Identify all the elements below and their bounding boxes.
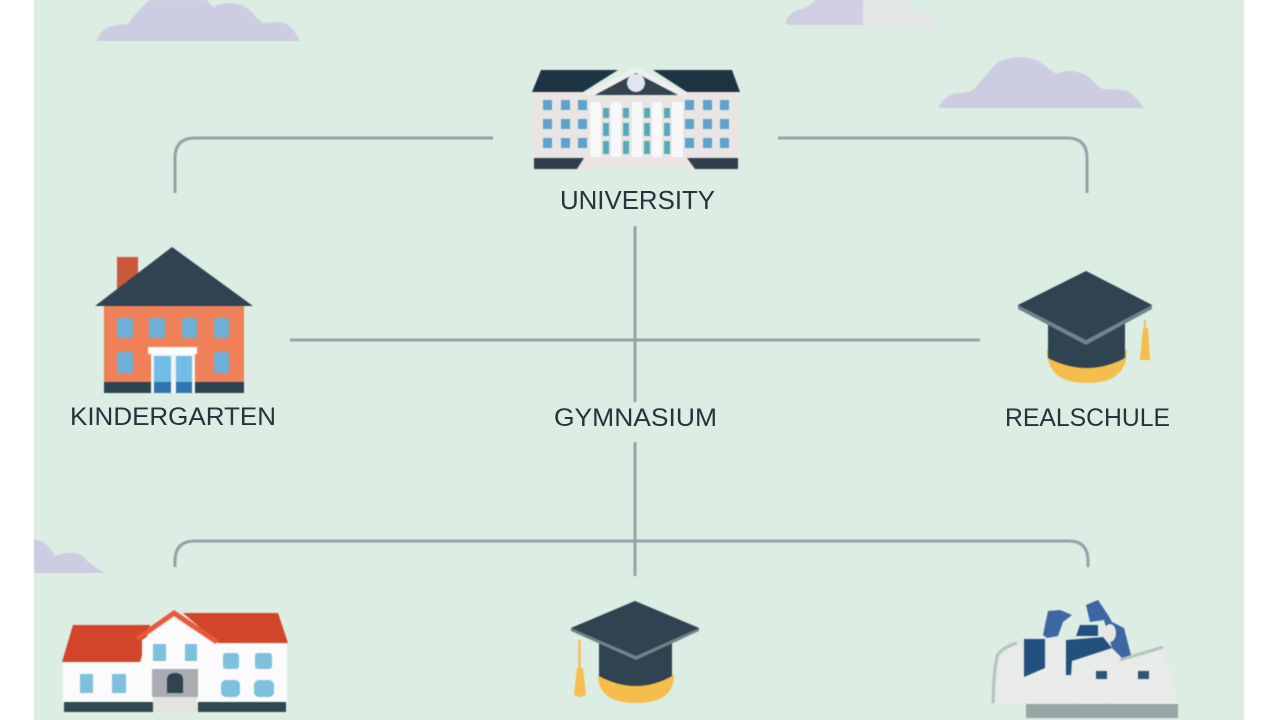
icon: graduation cap right xyxy=(1018,271,1152,383)
label: kindergarten: KINDERGARTEN xyxy=(70,403,276,431)
label: gymnasium: GYMNASIUM xyxy=(554,404,717,432)
cloud: left edge xyxy=(34,539,105,573)
label: realschule: REALSCHULE xyxy=(1005,404,1170,432)
icon: modern building with sculpture xyxy=(993,600,1178,718)
icon: graduation cap centre xyxy=(571,601,699,703)
icon: kindergarten house xyxy=(95,247,253,393)
label: university: UNIVERSITY xyxy=(560,185,715,215)
clouds xyxy=(34,0,1144,573)
cloud: top left xyxy=(97,0,300,41)
icon: school building xyxy=(62,613,288,712)
icon: university building xyxy=(532,67,740,170)
cloud: top centre xyxy=(785,0,940,29)
connector lines xyxy=(175,138,1088,576)
cloud: top right xyxy=(938,57,1144,108)
